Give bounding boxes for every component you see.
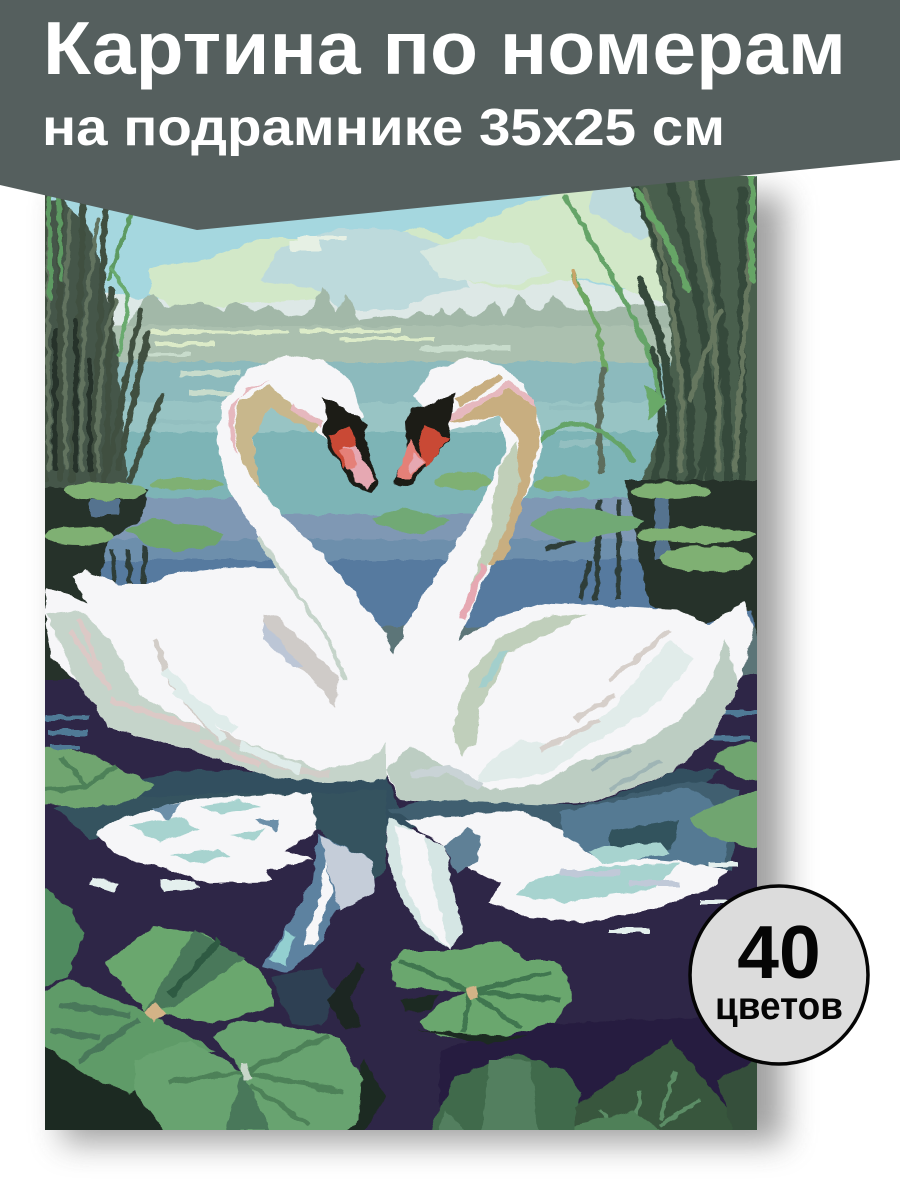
- pad centre: [390, 940, 572, 1040]
- pad front: [134, 1020, 361, 1140]
- left swan head and beak: [323, 397, 378, 493]
- left reeds: [45, 195, 164, 488]
- badge: 40 colours: 40: [737, 910, 821, 994]
- header band: [0, 0, 900, 230]
- right swan wing mark: [452, 613, 588, 757]
- subtitle: на подрамнике 35х25 см: [42, 99, 725, 157]
- sky: [51, 176, 756, 326]
- left swan neck colouring: [233, 385, 323, 488]
- right swan: [386, 358, 754, 808]
- badge: 40 colours: цветов: [715, 985, 843, 1028]
- pad bottom three: [717, 1062, 757, 1130]
- rings under the swans: [60, 770, 720, 830]
- mid lily pads: [35, 740, 767, 848]
- lake: [35, 326, 767, 1140]
- canvas shadow: [62, 195, 784, 1143]
- right swan head and beak: [393, 393, 455, 487]
- right swan neck colouring: [450, 388, 540, 565]
- right reeds: [541, 176, 767, 480]
- distant lily pads: [45, 472, 756, 572]
- left swan: [45, 355, 397, 783]
- painting: swans on a lake: [35, 166, 767, 1140]
- water reflections: [54, 780, 740, 973]
- badge: 40 colours: [690, 886, 868, 1064]
- foreground lily pads: [35, 888, 767, 1140]
- pad bottom one: [432, 1054, 582, 1130]
- pad top: [104, 927, 275, 1023]
- pond shadows: [35, 480, 767, 760]
- pad left: [35, 980, 215, 1093]
- pond debris and deep shadow: [35, 963, 757, 1140]
- title: Картина по номерам: [43, 6, 846, 90]
- far tree line: [126, 287, 672, 328]
- pad far left: [45, 888, 84, 986]
- left swan wing mark: [263, 613, 340, 707]
- pad bottom two: [574, 1039, 733, 1130]
